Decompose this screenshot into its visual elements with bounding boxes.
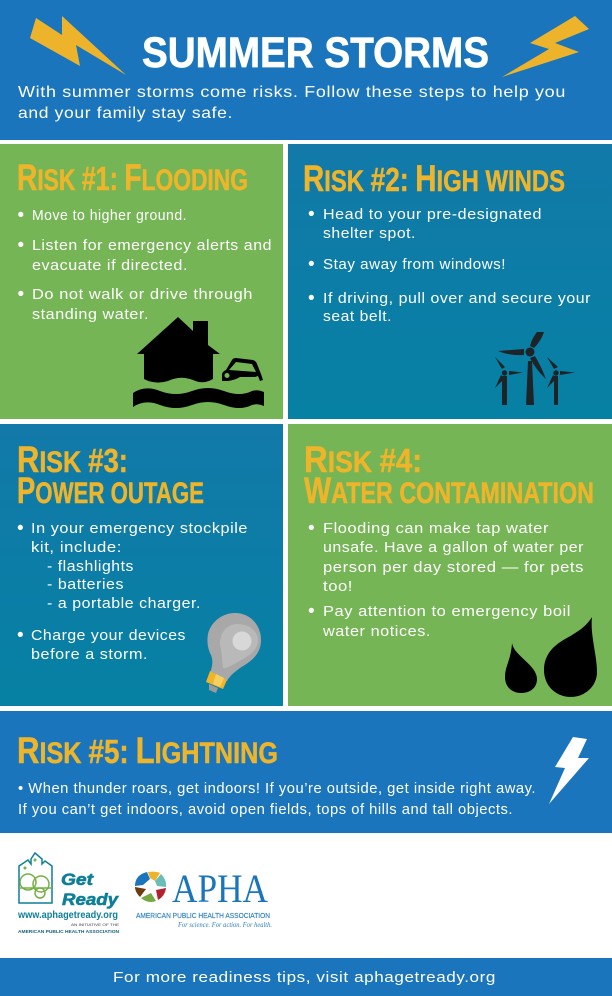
bullet list: risk 4: Flooding can make tap water: [323, 521, 549, 537]
icon: right lightning bolt: [502, 16, 589, 77]
intro text: [18, 84, 566, 122]
bullet list: risk 1: •: [18, 235, 24, 256]
icon: Get Ready house: [19, 853, 52, 903]
Get Ready wordmark: Get: [61, 870, 95, 889]
intro text: With summer storms come risks. Follow these steps to help you: [18, 84, 566, 101]
heading: risk 3: POWER OUTAGE: [17, 470, 204, 511]
initiative note: [18, 922, 119, 934]
bullet list: risk 4: •: [308, 518, 315, 539]
heading: risk 2: RISK #2: HIGH WINDS: [303, 158, 565, 199]
bullet list: risk 3: Charge your devices: [31, 628, 186, 644]
bullet list: risk 4: [308, 518, 584, 640]
icon: flooded house and car: [133, 317, 264, 408]
body text: risk 5: [18, 781, 536, 818]
bullet list: risk 1: •: [18, 205, 24, 226]
bullet list: risk 4: unsafe. Have a gallon of water per: [323, 540, 584, 556]
bullet list: risk 2: Head to your pre-designated: [323, 207, 542, 223]
Get Ready wordmark: [61, 870, 120, 909]
title: SUMMER STORMS: [142, 29, 489, 77]
header panel: [0, 0, 612, 140]
bullet list: risk 3: In your emergency stockpile: [31, 521, 248, 537]
heading: risk 3: RISK #3:: [17, 439, 128, 480]
bullet list: risk 3: - a portable charger.: [47, 596, 201, 612]
bullet list: risk 4: •: [308, 601, 315, 622]
bullet list: risk 4: too!: [323, 579, 353, 595]
initiative note: AN INITIATIVE OF THE: [71, 922, 119, 927]
bullet list: risk 1: [18, 205, 272, 323]
url: www.aphagetready.org: [17, 909, 118, 921]
bullet list: risk 3: •: [17, 625, 24, 646]
logo: Get Ready: [17, 853, 120, 934]
icon: white lightning bolt: [549, 737, 589, 804]
bullet list: risk 3: - batteries: [47, 577, 124, 593]
bullet list: risk 2: [308, 204, 591, 325]
logo: APHA: [135, 866, 272, 929]
icon: wind turbines: [495, 332, 575, 405]
footer bar: [0, 958, 612, 996]
heading: risk 1: RISK #1: FLOODING: [17, 157, 248, 198]
bullet list: risk 1: Listen for emergency alerts and: [32, 238, 272, 254]
icon: APHA colour wheel: [135, 872, 166, 902]
bullet list: risk 3: •: [17, 518, 24, 539]
bullet list: risk 3: - flashlights: [47, 559, 134, 575]
heading: risk 3: [17, 439, 204, 511]
bullet list: risk 2: shelter spot.: [323, 226, 416, 242]
panel: risk 5 lightning: [0, 711, 612, 833]
bullet list: risk 4: Pay attention to emergency boil: [323, 604, 571, 620]
bullet list: risk 4: person per day stored — for pets: [323, 560, 584, 576]
panel: risk 2 high winds: [288, 144, 612, 419]
panel: risk 4 water contamination: [288, 424, 612, 706]
association name: AMERICAN PUBLIC HEALTH ASSOCIATION: [136, 911, 270, 920]
bullet list: risk 2: Stay away from windows!: [323, 257, 506, 273]
bullet list: risk 4: water notices.: [322, 624, 431, 640]
bullet list: risk 1: standing water.: [32, 307, 149, 323]
icon: light bulb: [206, 613, 261, 693]
intro text: and your family stay safe.: [18, 105, 233, 122]
bullet list: risk 1: Move to higher ground.: [32, 208, 187, 224]
bullet list: risk 2: seat belt.: [323, 309, 392, 325]
bullet list: risk 3: kit, include:: [31, 540, 122, 556]
bullet list: risk 1: Do not walk or drive through: [32, 287, 253, 303]
icon: left lightning bolt: [30, 16, 126, 75]
APHA wordmark: APHA: [172, 866, 268, 911]
Get Ready wordmark: Ready: [62, 890, 120, 909]
initiative note: AMERICAN PUBLIC HEALTH ASSOCIATION: [18, 929, 119, 934]
bullet list: risk 3: [17, 518, 248, 663]
bullet list: risk 1: •: [18, 284, 24, 305]
icon: water drops: [505, 617, 597, 697]
bullet list: risk 2: •: [308, 288, 315, 309]
panel: risk 1 flooding: [0, 144, 283, 419]
heading: risk 5: RISK #5: LIGHTNING: [17, 730, 278, 771]
heading: risk 4: RISK #4:: [304, 439, 422, 480]
panel: risk 3 power outage: [0, 424, 283, 706]
bullet list: risk 2: •: [308, 254, 315, 275]
bullet list: risk 2: •: [308, 204, 315, 225]
bullet list: risk 3: before a storm.: [31, 647, 148, 663]
body text: risk 5: If you can’t get indoors, avoid open fields, tops of hills and tall objects.: [18, 802, 513, 818]
heading: risk 4: [304, 439, 594, 511]
body text: risk 5: • When thunder roars, get indoors! If you’re outside, get inside right away.: [18, 781, 536, 797]
footer text: For more readiness tips, visit aphagetready.org: [113, 970, 496, 986]
bullet list: risk 2: If driving, pull over and secure your: [323, 291, 591, 307]
tagline: For science. For action. For health.: [177, 921, 272, 929]
bullet list: risk 1: evacuate if directed.: [32, 258, 188, 274]
